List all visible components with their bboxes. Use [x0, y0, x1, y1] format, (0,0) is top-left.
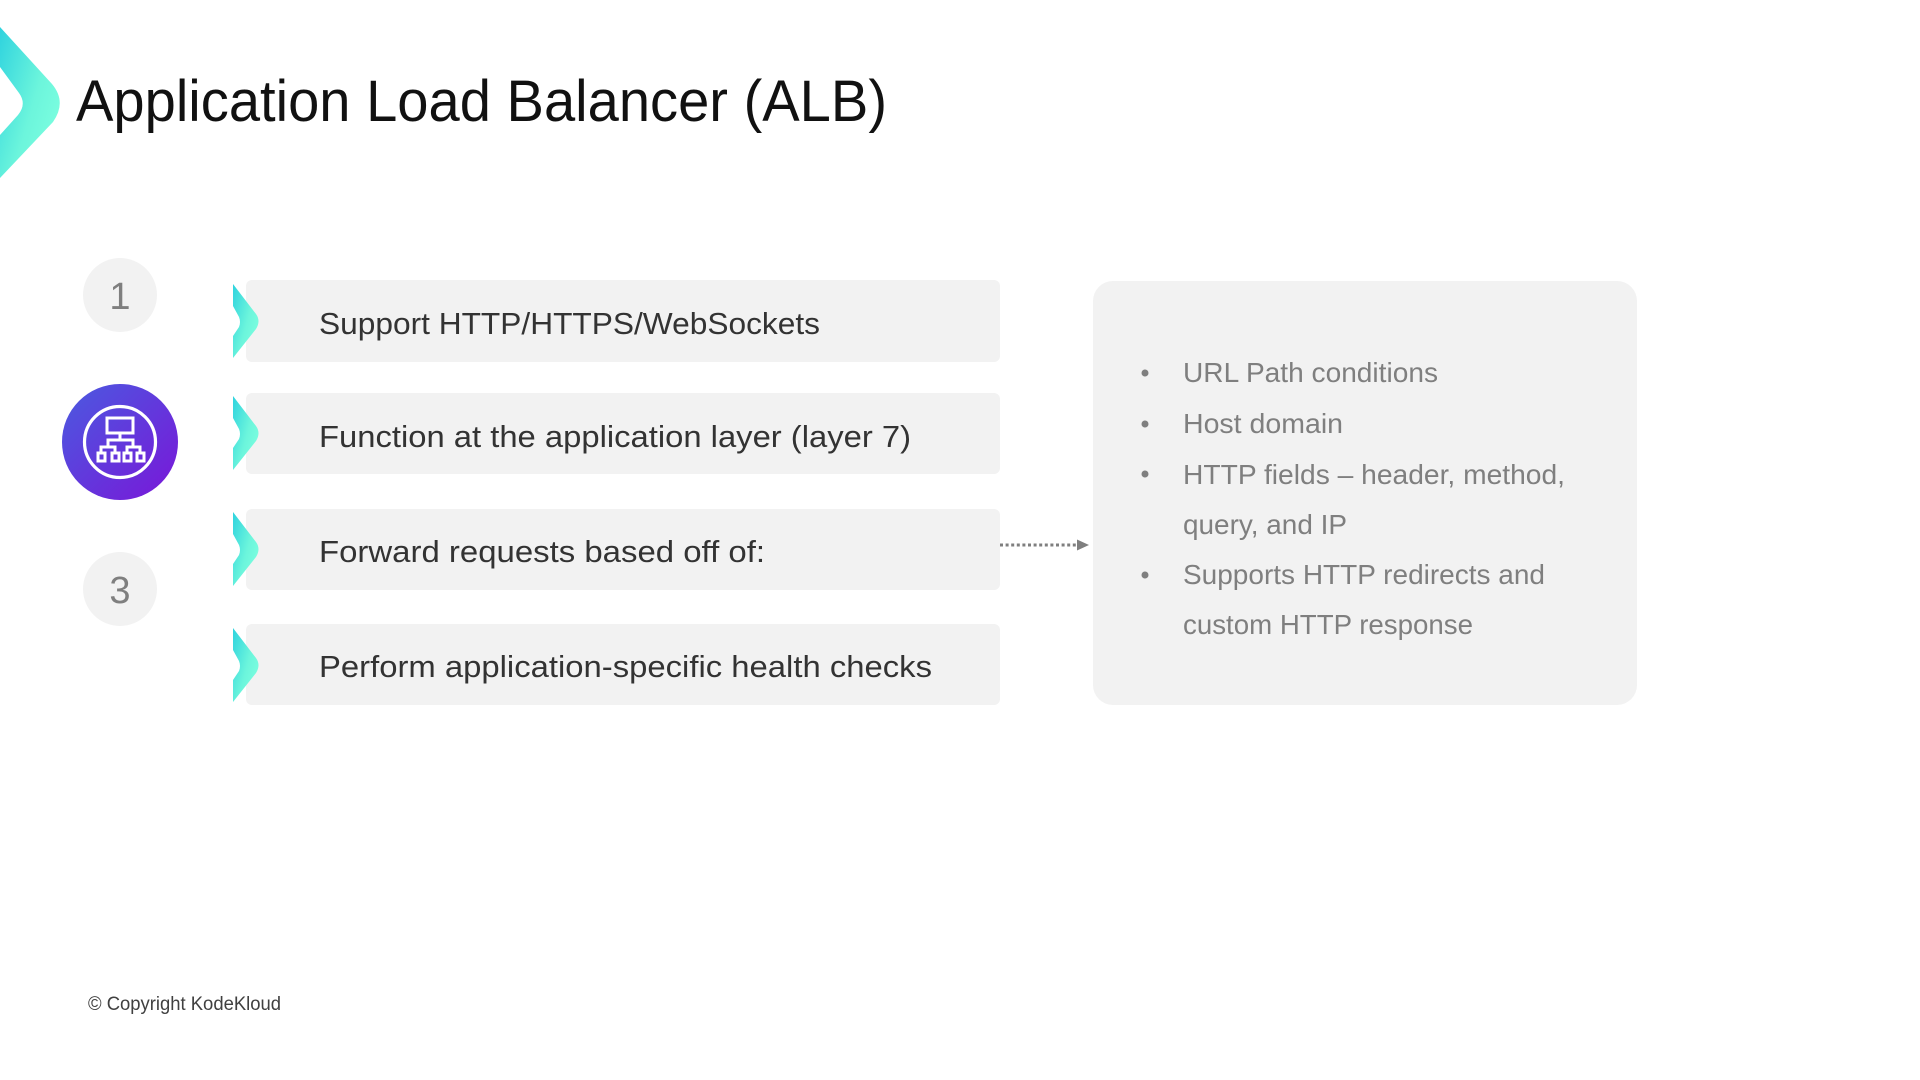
panel: forwarding conditions: query, and IP: [1183, 509, 1347, 540]
title: Application Load Balancer (ALB): [76, 69, 887, 134]
icon: title chevron: [0, 27, 60, 178]
step marker 3: [83, 552, 157, 626]
row 2: application layer: [233, 393, 1000, 474]
row 3: forward requests: [233, 509, 1000, 590]
panel: forwarding conditions: custom HTTP response: [1183, 609, 1473, 640]
step marker 3: 3: [109, 570, 131, 612]
row 1: HTTP support: [233, 280, 1000, 362]
row 1: HTTP support: Support HTTP/HTTPS/WebSockets: [319, 306, 820, 341]
row 3: forward requests: Forward requests based off of:: [319, 534, 765, 569]
row 4: health checks: Perform application-specific health checks: [319, 649, 932, 684]
copyright footer: © Copyright KodeKloud: [88, 994, 281, 1015]
panel: forwarding conditions: HTTP fields – header, method,: [1183, 459, 1565, 490]
arrow: row 3 to details panel: [1000, 540, 1089, 550]
row 2: application layer: Function at the application layer (layer 7): [319, 419, 911, 454]
row 4: health checks: [233, 624, 1000, 705]
panel: forwarding conditions: URL Path conditions: [1183, 357, 1438, 388]
panel: forwarding conditions: [1093, 281, 1637, 705]
step marker 1: [83, 258, 157, 332]
panel: forwarding conditions: Host domain: [1183, 408, 1343, 439]
step marker 2: active load balancer icon: [62, 384, 178, 500]
step marker 1: 1: [109, 276, 131, 318]
panel: forwarding conditions: Supports HTTP redirects and: [1183, 559, 1545, 590]
